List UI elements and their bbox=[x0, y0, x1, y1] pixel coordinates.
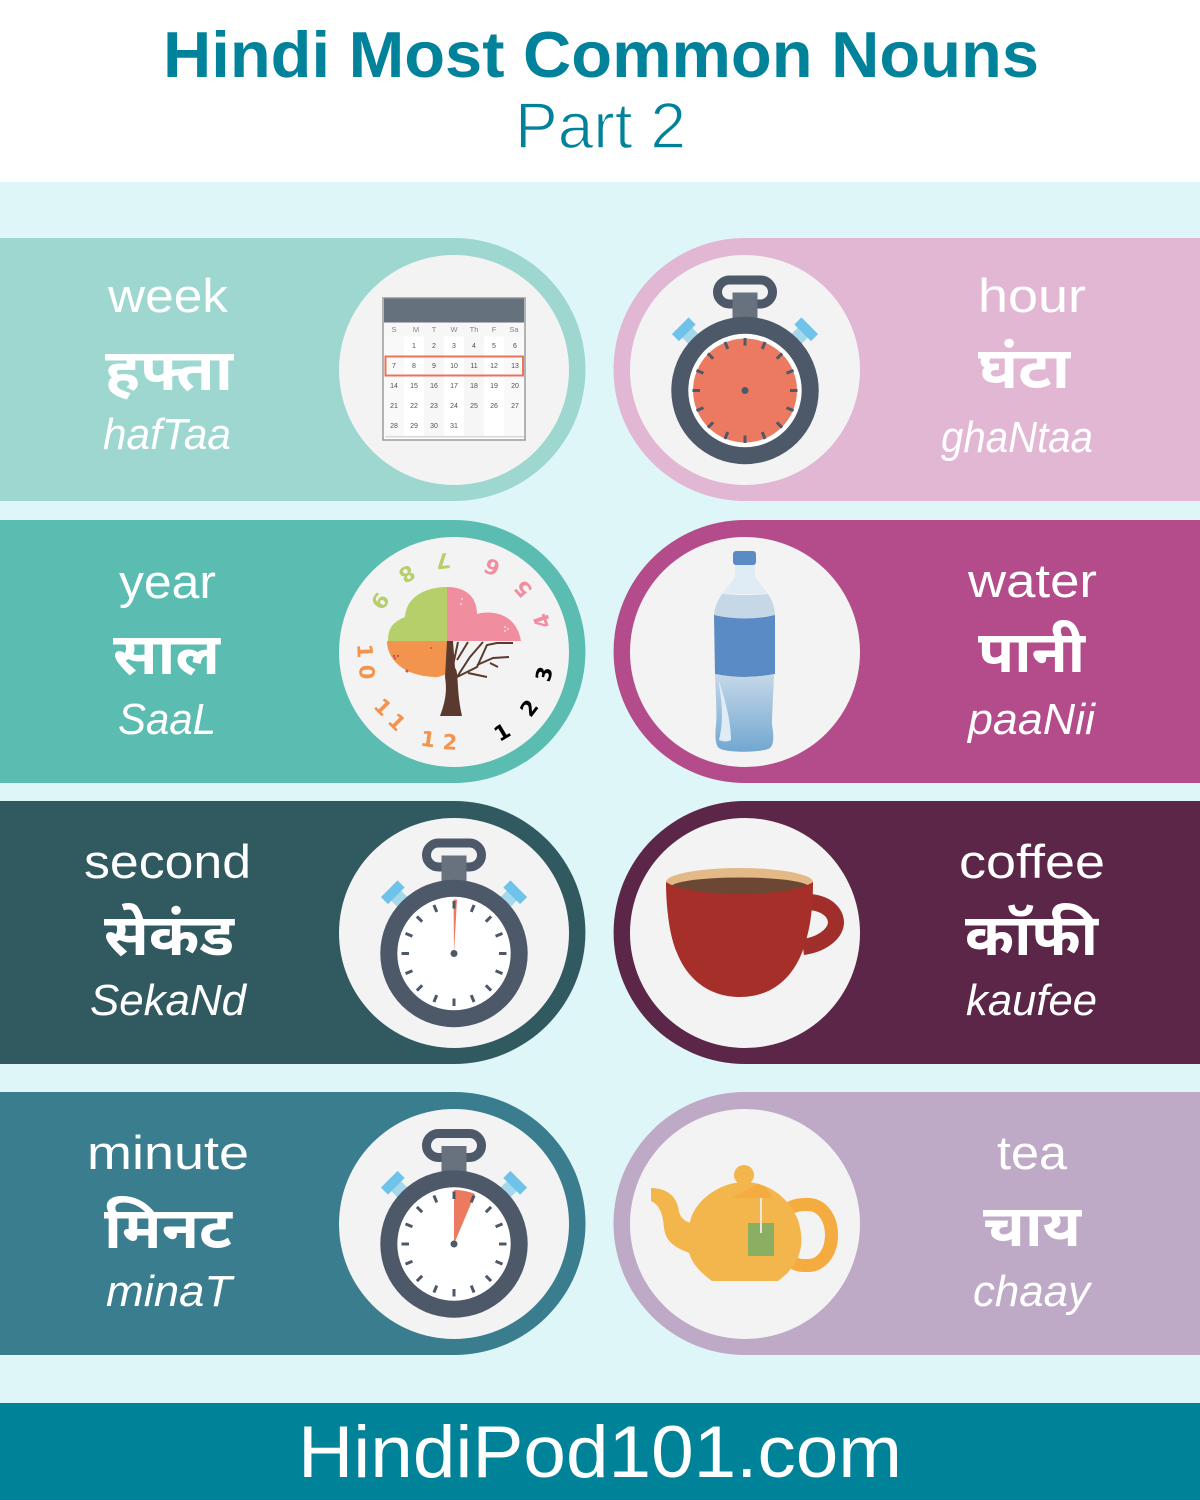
label: minute bbox=[87, 1126, 249, 1316]
icon: stopwatch one minute bbox=[380, 1134, 528, 1318]
icon: calendar: 15 bbox=[410, 383, 418, 390]
icon: four-season tree with month numbers: 3 bbox=[531, 664, 558, 684]
title bbox=[163, 18, 1039, 162]
icon: calendar bbox=[383, 298, 525, 440]
icon: four-season tree with month numbers: 4 bbox=[529, 610, 556, 632]
icon: calendar: 25 bbox=[470, 403, 478, 410]
icon: calendar: 26 bbox=[490, 403, 498, 410]
label: week bbox=[103, 269, 234, 459]
label: tea: चाय bbox=[983, 1194, 1082, 1270]
icon: calendar: 7 bbox=[392, 363, 396, 370]
label: year: year bbox=[119, 555, 216, 608]
label: water: water bbox=[967, 554, 1097, 607]
icon: four-season tree with month numbers: 1 bbox=[352, 643, 377, 659]
icon: calendar: M bbox=[413, 325, 419, 334]
icon: calendar: 30 bbox=[430, 423, 438, 430]
icon: calendar: 9 bbox=[432, 363, 436, 370]
icon: four-season tree with month numbers: 2 bbox=[442, 730, 458, 755]
icon: calendar: Sa bbox=[509, 325, 519, 334]
icon: stopwatch with orange face bbox=[671, 280, 819, 464]
icon: coffee cup bbox=[666, 868, 836, 997]
panel: week bbox=[0, 238, 586, 501]
icon: calendar: 1 bbox=[412, 343, 416, 350]
label: tea bbox=[973, 1126, 1093, 1316]
icon: calendar: 3 bbox=[452, 343, 456, 350]
label: minute: minaT bbox=[106, 1267, 235, 1316]
label: week: hafTaa bbox=[103, 410, 231, 459]
icon: calendar: 10 bbox=[450, 363, 458, 370]
icon: calendar: 12 bbox=[490, 363, 498, 370]
icon: four-season tree with month numbers: 1 bbox=[419, 727, 437, 752]
icon: four-season tree with month numbers: 9 bbox=[366, 588, 394, 614]
icon: calendar: Th bbox=[470, 325, 478, 334]
icon: calendar: S bbox=[391, 325, 397, 334]
panel: hour bbox=[614, 238, 1200, 501]
icon: four-season tree with month numbers: 7 bbox=[434, 548, 452, 573]
icon: calendar: 13 bbox=[511, 363, 519, 370]
label: coffee: coffee bbox=[959, 835, 1105, 888]
icon: calendar: 27 bbox=[511, 403, 519, 410]
label: year bbox=[113, 555, 221, 744]
label: water: पानी bbox=[978, 620, 1086, 696]
label: second: SekaNd bbox=[90, 976, 248, 1025]
label: water: paaNii bbox=[966, 695, 1096, 744]
icon: four-season tree with month numbers bbox=[352, 548, 558, 755]
icon: four-season tree with month numbers: 1 bbox=[369, 694, 396, 721]
label: week: week bbox=[107, 269, 229, 322]
label: minute: minute bbox=[87, 1126, 249, 1179]
panel: tea bbox=[614, 1092, 1200, 1355]
icon: teapot bbox=[651, 1165, 832, 1281]
icon: calendar: 6 bbox=[513, 343, 517, 350]
icon: calendar: 2 bbox=[432, 343, 436, 350]
icon: calendar: 20 bbox=[511, 383, 519, 390]
footer: HindiPod101.com bbox=[298, 1412, 902, 1493]
label: hour: घंटा bbox=[978, 336, 1071, 412]
label: coffee: kaufee bbox=[966, 976, 1097, 1025]
panel: year bbox=[0, 520, 585, 783]
icon: calendar: 19 bbox=[490, 383, 498, 390]
label: coffee bbox=[959, 835, 1105, 1025]
icon: calendar: 24 bbox=[450, 403, 458, 410]
label: tea: chaay bbox=[973, 1267, 1093, 1316]
icon: calendar: 4 bbox=[472, 343, 476, 350]
title: Part 2 bbox=[515, 89, 686, 162]
icon: stopwatch one second bbox=[380, 843, 528, 1027]
icon: calendar: 8 bbox=[412, 363, 416, 370]
label: year: साल bbox=[113, 622, 221, 698]
label: second: सेकंड bbox=[104, 903, 235, 979]
label: minute: मिनट bbox=[104, 1196, 234, 1272]
panel: coffee bbox=[614, 801, 1200, 1064]
icon: four-season tree with month numbers: 2 bbox=[515, 695, 543, 721]
label: second: second bbox=[84, 835, 251, 888]
label: year: SaaL bbox=[118, 695, 216, 744]
icon: calendar: T bbox=[432, 325, 437, 334]
icon: calendar: 5 bbox=[492, 343, 496, 350]
panel: second bbox=[0, 801, 585, 1064]
title: Hindi Most Common Nouns bbox=[163, 18, 1039, 91]
icon: four-season tree with month numbers: 0 bbox=[354, 664, 379, 680]
icon: calendar: 18 bbox=[470, 383, 478, 390]
footer bbox=[0, 1403, 1200, 1500]
icon: calendar: 17 bbox=[450, 383, 458, 390]
icon: four-season tree with month numbers: 6 bbox=[481, 553, 504, 580]
icon: four-season tree with month numbers: 5 bbox=[510, 575, 537, 602]
label: coffee: कॉफी bbox=[965, 903, 1099, 979]
label: hour: ghaNtaa bbox=[941, 413, 1093, 462]
icon: calendar: 31 bbox=[450, 423, 458, 430]
icon: calendar: 29 bbox=[410, 423, 418, 430]
icon: calendar: W bbox=[450, 325, 458, 334]
icon: calendar: 28 bbox=[390, 423, 398, 430]
icon: calendar: 23 bbox=[430, 403, 438, 410]
icon: four-season tree with month numbers: 1 bbox=[383, 709, 410, 736]
icon: four-season tree with month numbers: 1 bbox=[490, 718, 515, 746]
label: second bbox=[84, 835, 251, 1025]
label: water bbox=[966, 554, 1097, 744]
panel: water bbox=[614, 520, 1200, 783]
icon: calendar: 11 bbox=[470, 363, 478, 370]
icon: calendar: 21 bbox=[390, 403, 398, 410]
label: week: हफ्ता bbox=[105, 338, 234, 414]
icon: calendar: 14 bbox=[390, 383, 398, 390]
label: hour bbox=[941, 269, 1093, 462]
icon: four-season tree with month numbers: 8 bbox=[394, 560, 419, 588]
icon: calendar: 22 bbox=[410, 403, 418, 410]
panel: minute bbox=[0, 1092, 586, 1355]
icon: calendar: F bbox=[492, 325, 497, 334]
label: hour: hour bbox=[978, 269, 1086, 322]
icon: calendar: 16 bbox=[430, 383, 438, 390]
label: tea: tea bbox=[997, 1126, 1068, 1179]
icon: water bottle bbox=[714, 551, 775, 752]
